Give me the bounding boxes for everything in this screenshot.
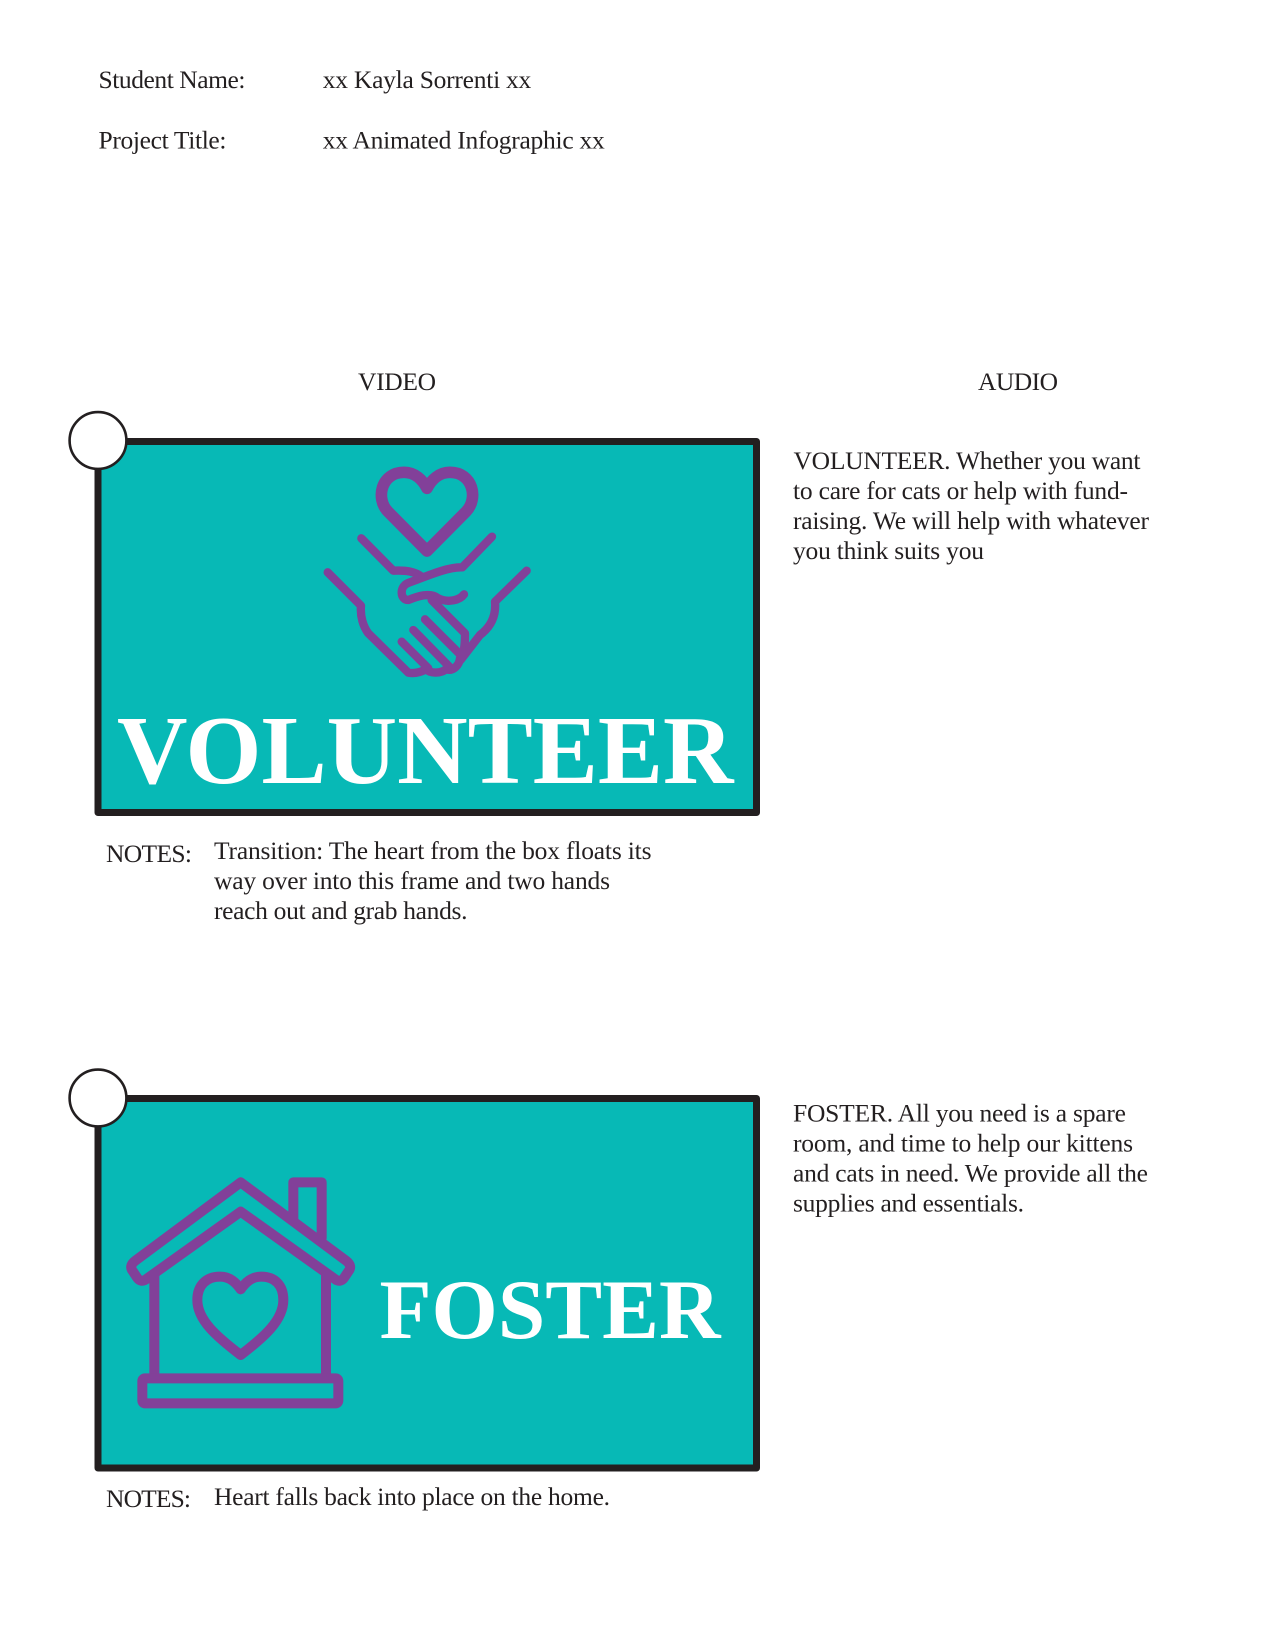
notes: volunteer frame	[106, 836, 652, 925]
header: student name and project title: xx Kayla Sorrenti xx	[323, 65, 532, 94]
audio script: volunteer: to care for cats or help with fund-	[793, 476, 1128, 505]
header: student name and project title: xx Animated Infographic xx	[323, 126, 605, 154]
notes: foster frame: NOTES:	[106, 1484, 191, 1513]
header: student name and project title: Student Name:	[98, 65, 246, 94]
audio script: foster: supplies and essentials.	[793, 1188, 1024, 1218]
icon: heart above joined hands	[328, 472, 527, 673]
panel: foster frame	[70, 1070, 757, 1468]
audio script: foster: FOSTER. All you need is a spare	[793, 1098, 1126, 1128]
header: student name and project title	[98, 65, 605, 154]
audio script: volunteer: raising. We will help with whatever	[793, 506, 1150, 535]
frame title: volunteer: VOLUNTEER	[117, 697, 735, 805]
audio script: foster: room, and time to help our kittens	[793, 1128, 1133, 1158]
frame marker circle	[70, 1070, 126, 1126]
header: student name and project title: Project Title:	[98, 126, 226, 154]
heading: video column: VIDEO	[358, 367, 436, 396]
icon: house with heart	[131, 1182, 350, 1403]
notes: volunteer frame: NOTES:	[106, 839, 192, 868]
audio script: volunteer	[793, 446, 1150, 565]
notes: volunteer frame: Transition: The heart from the box floats its	[214, 836, 652, 865]
heading: audio column: AUDIO	[978, 367, 1058, 396]
panel: volunteer frame	[70, 412, 757, 812]
frame background	[98, 442, 756, 812]
notes: foster frame: Heart falls back into place on the home.	[214, 1482, 610, 1511]
frame background	[98, 1098, 756, 1468]
audio script: volunteer: VOLUNTEER. Whether you want	[794, 446, 1140, 475]
audio script: volunteer: you think suits you	[793, 536, 984, 565]
notes: volunteer frame: reach out and grab hands.	[214, 896, 468, 925]
audio script: foster: and cats in need. We provide all the	[793, 1158, 1148, 1188]
notes: volunteer frame: way over into this frame and two hands	[214, 866, 610, 895]
frame marker circle	[70, 412, 126, 469]
frame title: foster: FOSTER	[380, 1263, 722, 1357]
audio script: foster	[793, 1098, 1148, 1218]
